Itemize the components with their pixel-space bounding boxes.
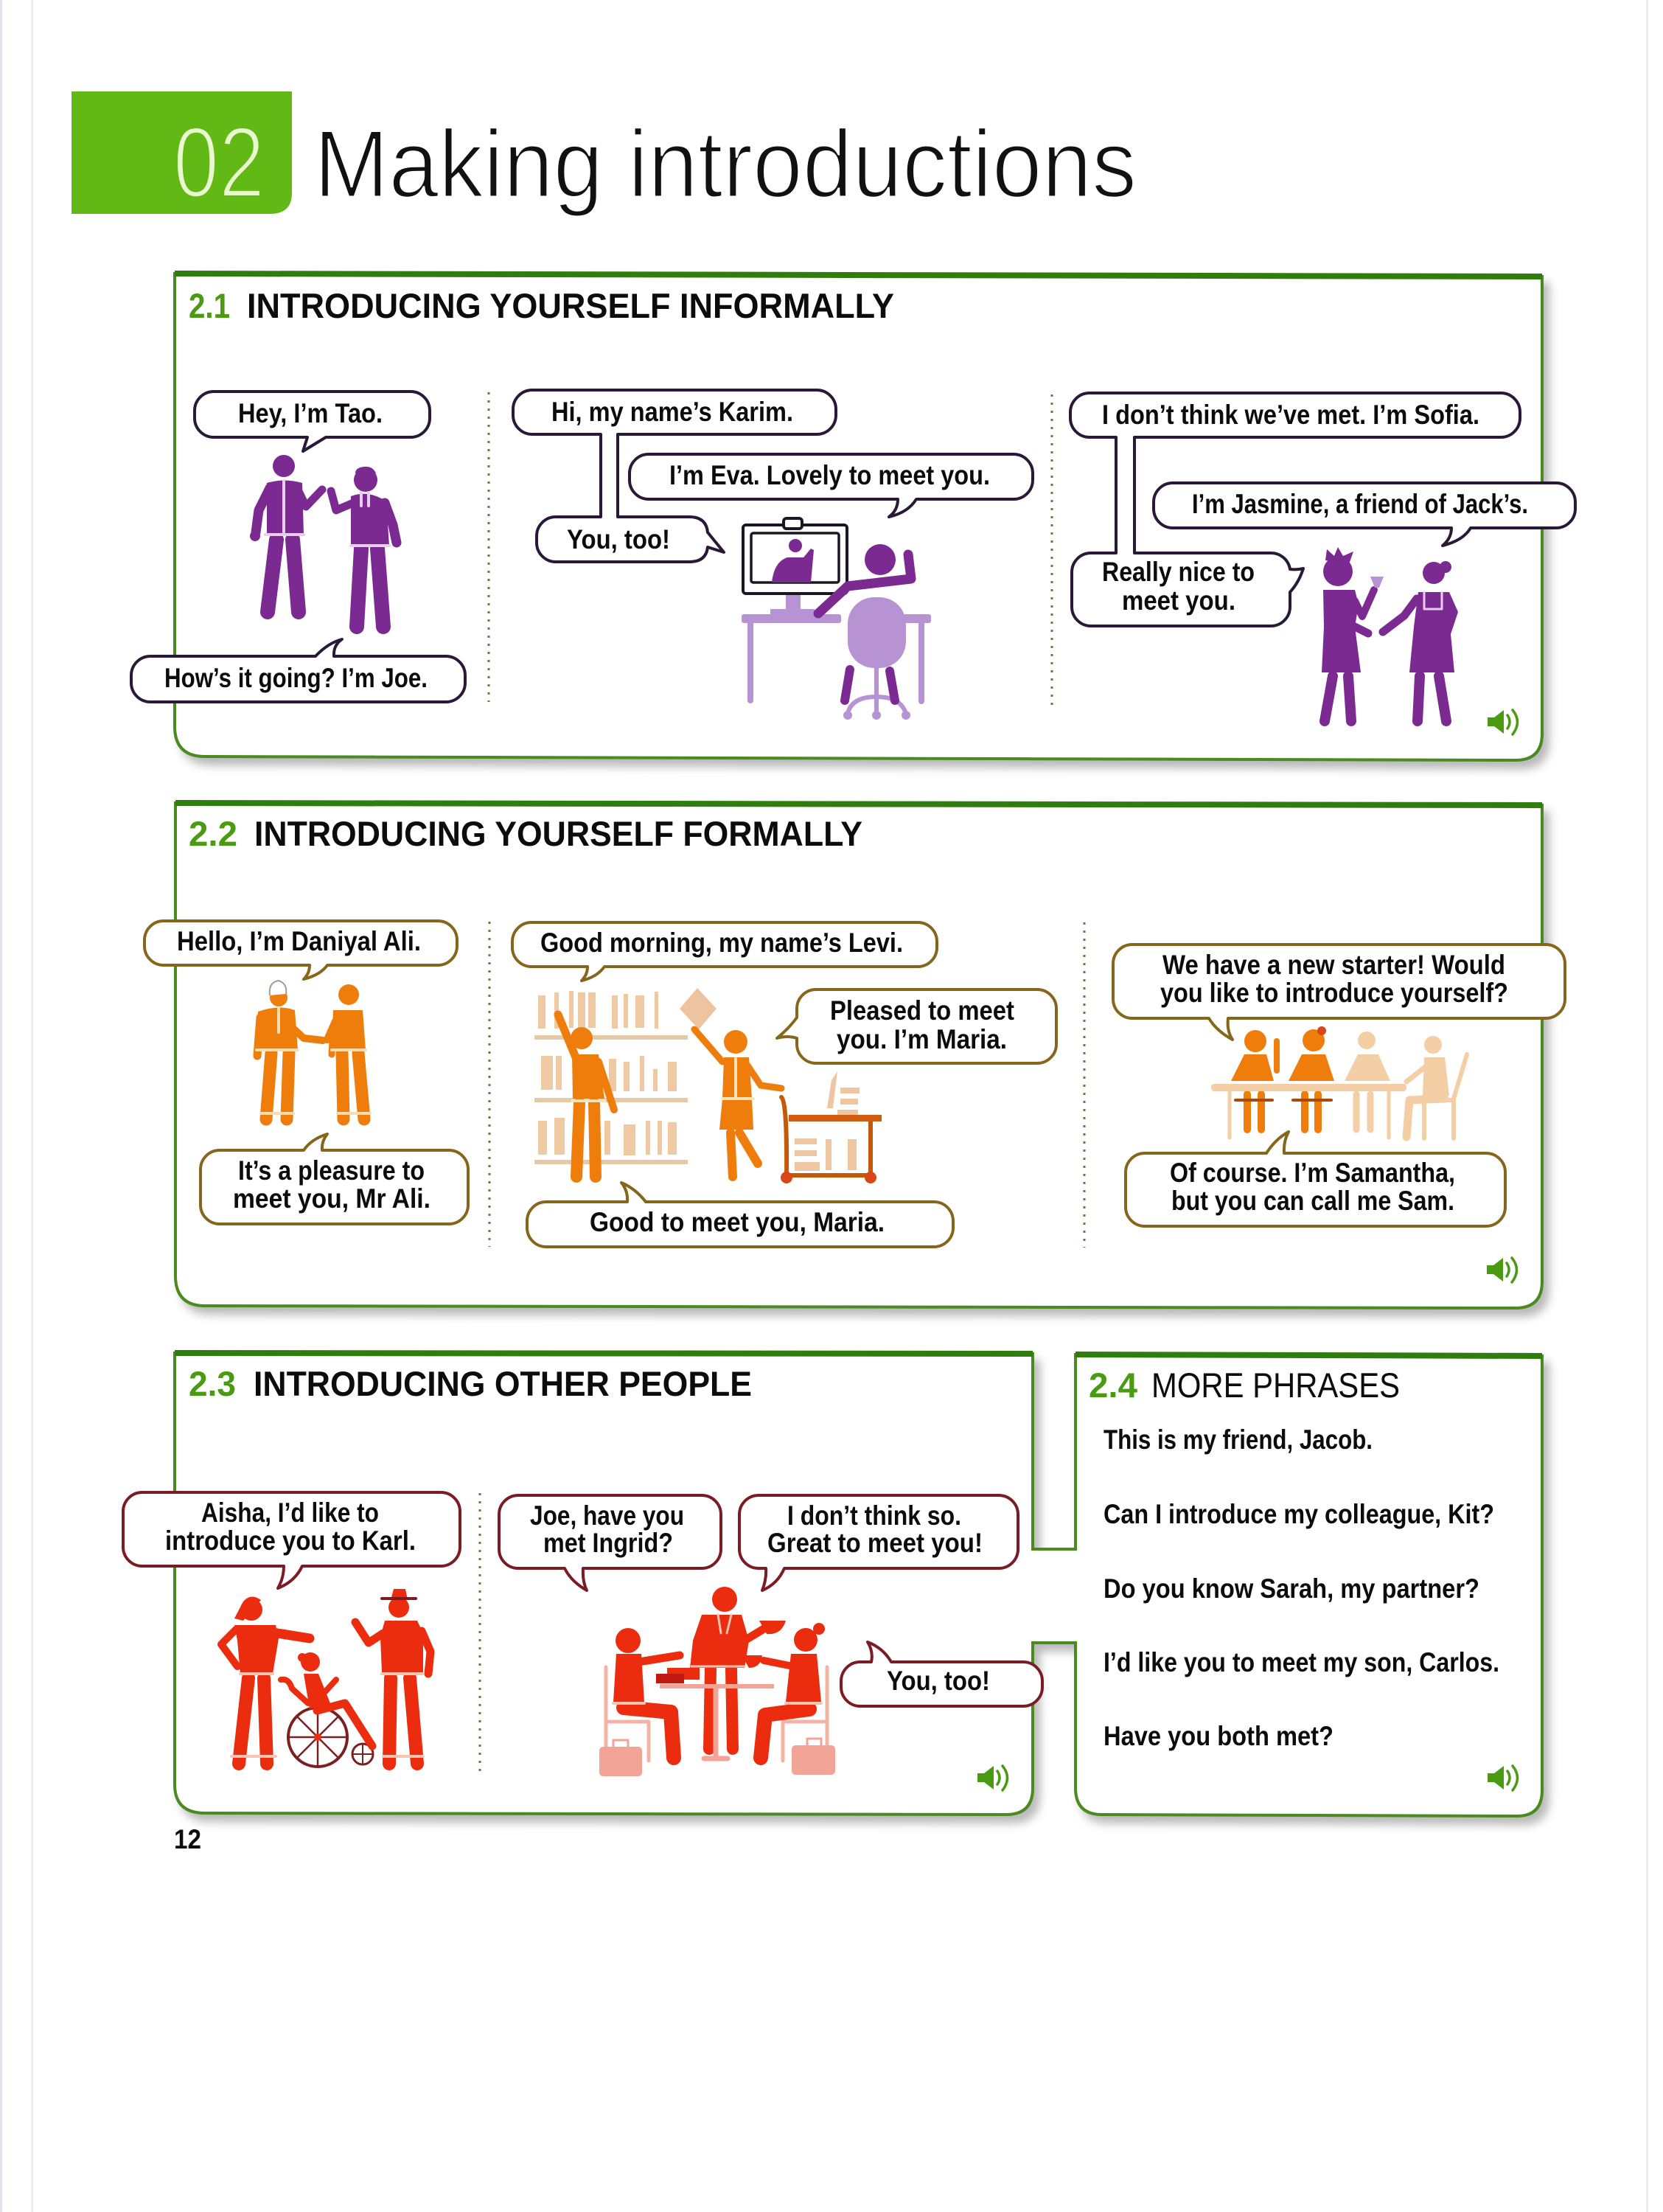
icon: audio speaker 2.3: [977, 1766, 1007, 1790]
speech bubbles: Sofia and Really nice to meet you: I don’t think we’ve met. I’m Sofia.: [1102, 400, 1479, 430]
phrase list: [1104, 1425, 1499, 1751]
figures: Tao and Joe bump fists: [250, 455, 397, 627]
wheelchair: [281, 1652, 373, 1767]
speech bubble: Jasmine: [1154, 483, 1575, 546]
figures: Sofia and Jasmine with drinks: [1322, 547, 1458, 721]
phrase list: Do you know Sarah, my partner?: [1104, 1573, 1479, 1604]
panel 2.1: introducing yourself informally: [131, 274, 1575, 760]
Levi: [571, 1027, 593, 1049]
speech bubble: Samantha: Of course. I’m Samantha,: [1170, 1158, 1455, 1188]
icon: audio speaker 2.2: [1487, 1258, 1517, 1282]
figures: bookshelf, Levi and Maria with a cart: [534, 988, 882, 1183]
heading 2.2: 2.2: [189, 814, 237, 853]
speech bubble: Joe, have you met Ingrid: [499, 1495, 721, 1590]
speech bubble: pleasure to meet you: meet you, Mr Ali.: [233, 1183, 430, 1214]
figures: handshake: [257, 981, 370, 1119]
title: Making introductions: [314, 110, 1137, 218]
speech bubble: Samantha: [1126, 1132, 1505, 1226]
speech bubble: Joe: [131, 639, 465, 702]
speech bubble: good to meet you, Maria: Good to meet you, Maria.: [590, 1207, 885, 1237]
figures: café table with three people: [599, 1587, 835, 1776]
speech bubble: Daniyal Ali: Hello, I’m Daniyal Ali.: [177, 926, 421, 956]
speech bubbles: Sofia and Really nice to meet you: meet you.: [1122, 585, 1235, 616]
page number: 12: [174, 1824, 201, 1854]
heading 2.4: MORE PHRASES: [1151, 1366, 1400, 1405]
speech bubble: pleasure to meet you: It’s a pleasure to: [238, 1155, 425, 1186]
speech bubble: I don't think so: I don’t think so.: [787, 1500, 961, 1531]
speech bubble: You, too!: You, too!: [887, 1666, 990, 1696]
speech bubbles: Karim and You, too!: [513, 390, 836, 562]
bookshelf: [534, 991, 688, 1164]
speech bubble: Maria: you. I’m Maria.: [837, 1024, 1007, 1054]
speech bubble: Eva: I’m Eva. Lovely to meet you.: [669, 460, 990, 490]
joined frame of panels 2.3 and 2.4: [175, 1353, 1542, 1816]
speech bubble: Aisha: Aisha, I’d like to: [201, 1498, 379, 1528]
speech bubble: Aisha: introduce you to Karl.: [165, 1526, 416, 1556]
speech bubble: Samantha: but you can call me Sam.: [1171, 1186, 1454, 1216]
heading 2.4: 2.4: [1089, 1366, 1137, 1405]
phrase list: This is my friend, Jacob.: [1104, 1425, 1373, 1455]
speech bubble: Tao: Hey, I’m Tao.: [238, 398, 383, 428]
panel frame 2.2: [175, 803, 1542, 1308]
speech bubble: new starter: [1113, 945, 1565, 1040]
heading 2.1: 2.1: [189, 286, 230, 325]
phrase list: I’d like you to meet my son, Carlos.: [1104, 1647, 1499, 1677]
speech bubble: You, too!: [841, 1642, 1042, 1706]
figures: video call at a desk: [742, 518, 931, 720]
heading 2.3: 2.3: [189, 1364, 236, 1403]
speech bubbles: Karim and You, too!: You, too!: [567, 524, 670, 554]
speech bubble: Jasmine: I’m Jasmine, a friend of Jack’s.: [1192, 489, 1528, 519]
heading 2.1: INTRODUCING YOURSELF INFORMALLY: [247, 286, 894, 325]
speech bubble: Aisha: [123, 1492, 460, 1588]
phrase list: Have you both met?: [1104, 1721, 1333, 1751]
panel 2.4: more phrases: [1089, 1366, 1517, 1790]
speech bubble: Daniyal Ali: [144, 921, 457, 979]
speech bubble: Joe, have you met Ingrid: Joe, have you: [530, 1500, 684, 1531]
figures: introducing Aisha and Karl: [221, 1589, 430, 1767]
speech bubble: new starter: We have a new starter! Would: [1162, 950, 1505, 980]
speech bubble: I don't think so: Great to meet you!: [767, 1528, 983, 1558]
speech bubbles: Sofia and Really nice to meet you: Really nice to: [1102, 557, 1255, 587]
speech bubble: Joe: How’s it going? I’m Joe.: [164, 663, 428, 693]
speech bubble: Levi: Good morning, my name’s Levi.: [540, 928, 903, 958]
panel 2.2: introducing yourself formally: [144, 803, 1565, 1308]
heading 2.3: INTRODUCING OTHER PEOPLE: [254, 1364, 752, 1403]
speech bubbles: Sofia and Really nice to meet you: [1070, 393, 1520, 626]
chapter number badge: 02: [173, 106, 265, 218]
book held up: [680, 988, 717, 1029]
phrase list: Can I introduce my colleague, Kit?: [1104, 1499, 1494, 1529]
speech bubble: good to meet you, Maria: [527, 1183, 953, 1247]
book cart: [781, 1097, 871, 1177]
speech bubble: Eva: [630, 454, 1033, 517]
Maria: [724, 1030, 747, 1054]
speech bubble: I don't think so: [739, 1495, 1018, 1590]
speech bubbles: Karim and You, too!: Hi, my name’s Karim.: [551, 397, 793, 427]
speech bubble: Maria: Pleased to meet: [830, 995, 1014, 1026]
icon: audio speaker 2.1: [1488, 710, 1517, 734]
speech bubble: Levi: [512, 922, 937, 981]
speech bubble: new starter: you like to introduce yourself?: [1160, 978, 1508, 1008]
heading 2.2: INTRODUCING YOURSELF FORMALLY: [254, 814, 862, 853]
speech bubble: Tao: [195, 392, 430, 451]
speech bubble: pleasure to meet you: [201, 1134, 468, 1224]
speech bubble: Joe, have you met Ingrid: met Ingrid?: [543, 1528, 673, 1558]
icon: audio speaker 2.4: [1488, 1766, 1517, 1790]
figures: meeting table: [1211, 1026, 1467, 1138]
panel 2.3: introducing other people: [123, 1364, 1042, 1790]
panel frame 2.1: [175, 274, 1542, 760]
speech bubble: Maria: [777, 990, 1056, 1063]
chapter number badge: [72, 91, 292, 218]
